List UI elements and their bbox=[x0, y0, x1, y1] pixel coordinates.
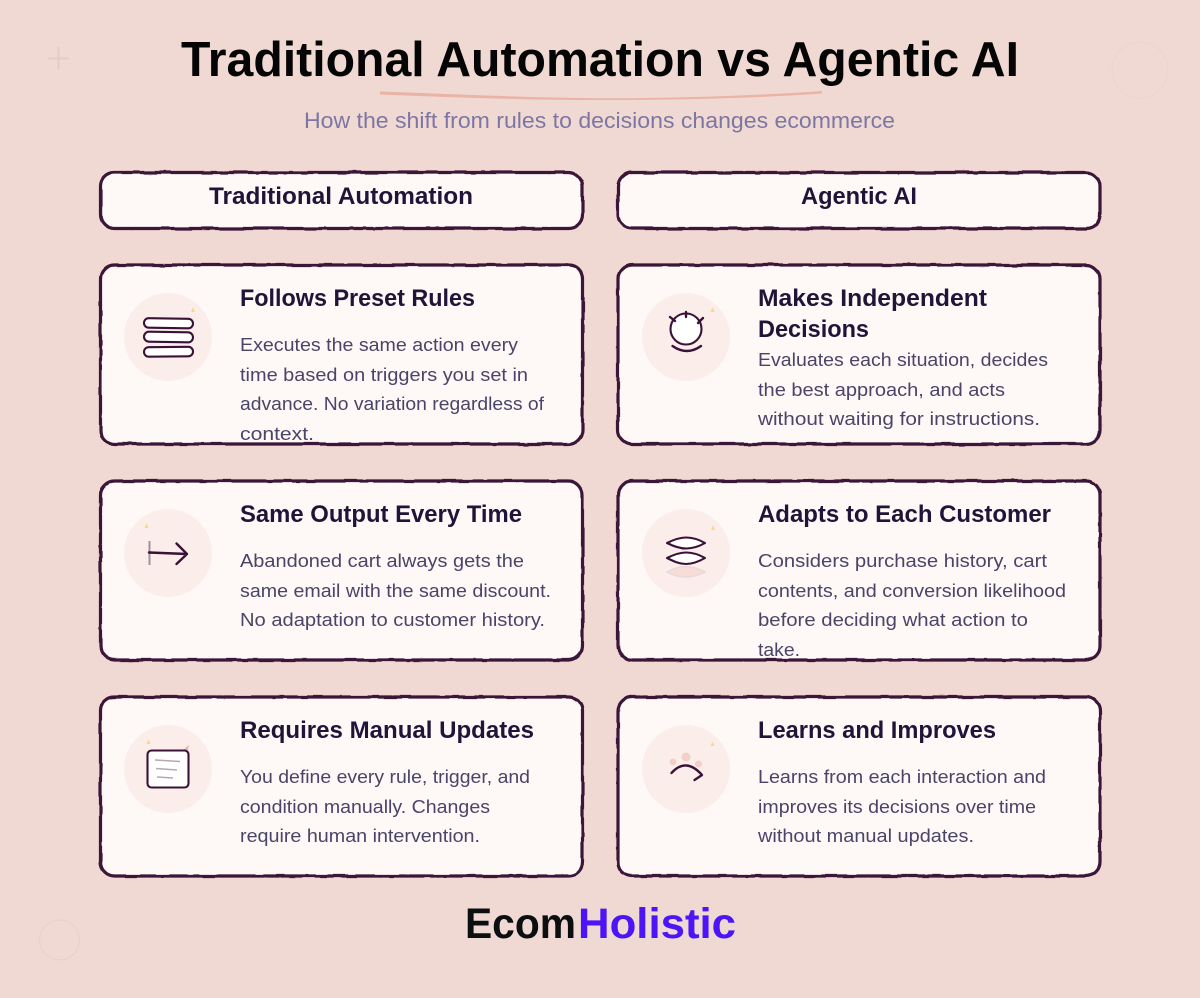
subtitle: How the shift from rules to decisions changes ecommerce bbox=[304, 108, 895, 133]
panel: Learns and Improves bbox=[618, 697, 1100, 876]
column header: Traditional Automation bbox=[100, 172, 582, 228]
description: the best approach, and acts bbox=[758, 380, 1005, 400]
description: advance. No variation regardless of bbox=[240, 394, 545, 414]
heading: Follows Preset Rules bbox=[240, 285, 475, 312]
description bbox=[240, 767, 530, 846]
heading: Adapts to Each Customer bbox=[758, 501, 1051, 528]
brand logo: Holistic bbox=[578, 900, 736, 948]
column header: Agentic AI bbox=[618, 172, 1100, 228]
description: require human intervention. bbox=[240, 826, 480, 846]
description: without manual updates. bbox=[757, 826, 974, 846]
panel: Follows Preset Rules bbox=[100, 265, 582, 444]
description: same email with the same discount. bbox=[240, 581, 551, 601]
panel: Requires Manual Updates bbox=[100, 697, 582, 876]
decorative plus bbox=[48, 47, 69, 69]
heading: Learns and Improves bbox=[758, 717, 996, 744]
icon: stacked rules bbox=[124, 293, 212, 381]
brand logo: Ecom bbox=[465, 900, 576, 948]
panel: Makes Independent Decisions bbox=[618, 265, 1100, 444]
description: contents, and conversion likelihood bbox=[758, 581, 1066, 601]
description bbox=[240, 551, 551, 630]
heading: Makes Independent bbox=[758, 285, 987, 312]
description: You define every rule, trigger, and bbox=[240, 767, 530, 787]
description bbox=[240, 335, 545, 444]
brand logo bbox=[465, 900, 736, 948]
panel: Same Output Every Time bbox=[100, 481, 582, 660]
decorative circle bottom left bbox=[40, 920, 80, 960]
description: Considers purchase history, cart bbox=[758, 551, 1047, 571]
column header: Traditional Automation: Traditional Automation bbox=[209, 183, 473, 210]
description: No adaptation to customer history. bbox=[240, 610, 545, 630]
heading bbox=[758, 285, 987, 343]
decorative circle top right bbox=[1112, 42, 1168, 98]
icon: fixed arrow bbox=[124, 509, 212, 597]
description: improves its decisions over time bbox=[758, 797, 1036, 817]
icon: learning arc bbox=[642, 725, 730, 813]
description bbox=[757, 767, 1046, 846]
icon: document bbox=[124, 725, 212, 813]
description: condition manually. Changes bbox=[240, 797, 490, 817]
description: time based on triggers you set in bbox=[240, 365, 528, 385]
description: without waiting for instructions. bbox=[757, 409, 1040, 429]
panel: Adapts to Each Customer bbox=[618, 481, 1100, 660]
heading: Same Output Every Time bbox=[240, 501, 522, 528]
description bbox=[757, 350, 1048, 429]
heading: Decisions bbox=[758, 316, 869, 343]
description: context. bbox=[240, 424, 314, 444]
description bbox=[758, 551, 1066, 660]
title underline bbox=[380, 91, 822, 100]
title: Traditional Automation vs Agentic AI bbox=[181, 33, 1019, 87]
column header: Agentic AI: Agentic AI bbox=[801, 183, 917, 210]
description: Executes the same action every bbox=[240, 335, 518, 355]
description: take. bbox=[758, 640, 800, 660]
description: Evaluates each situation, decides bbox=[758, 350, 1048, 370]
icon: decision eye bbox=[642, 293, 730, 381]
description: Abandoned cart always gets the bbox=[240, 551, 524, 571]
description: before deciding what action to bbox=[758, 610, 1028, 630]
icon: layered leaves bbox=[642, 509, 730, 597]
heading: Requires Manual Updates bbox=[240, 717, 534, 744]
description: Learns from each interaction and bbox=[758, 767, 1046, 787]
